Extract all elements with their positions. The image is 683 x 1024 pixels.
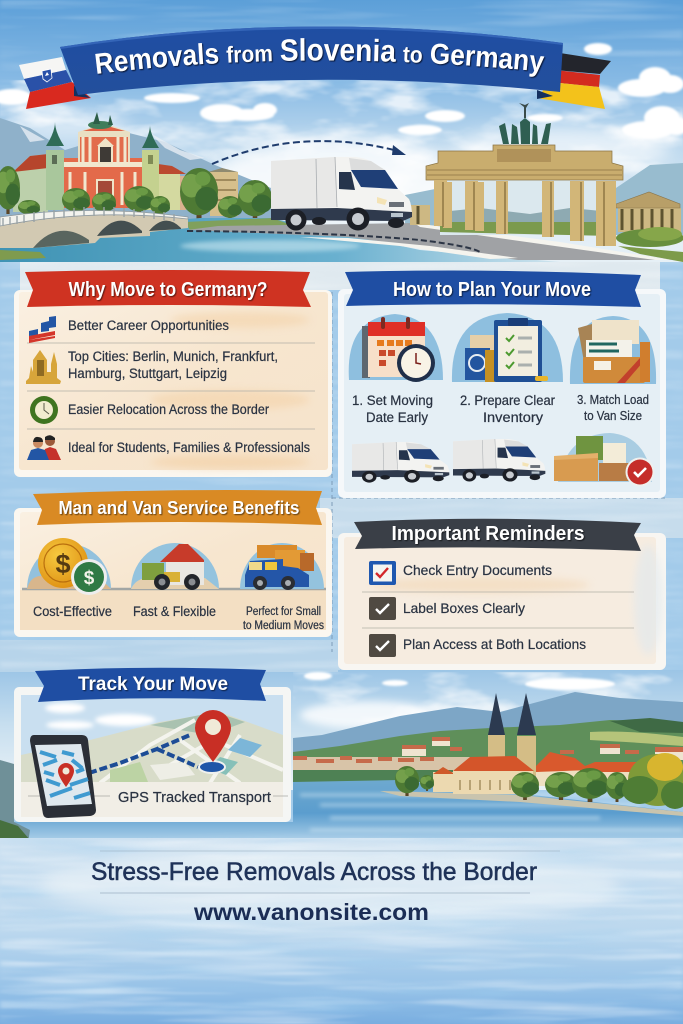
- ribbon: track: [35, 668, 266, 702]
- river: [0, 218, 560, 262]
- trees: [395, 753, 683, 809]
- caption rules: [28, 795, 288, 797]
- text: ideal for: Ideal for Students, Families & Professionals: [68, 440, 310, 455]
- step labels: to Van Size: [584, 409, 642, 423]
- reminder: entry documents: Check Entry Documents: [403, 562, 552, 578]
- reminder: plan access: [369, 634, 586, 657]
- reminder: plan access: Plan Access at Both Locations: [403, 636, 586, 652]
- Brandenburg Gate: [426, 103, 623, 246]
- icon: calendar and clock: [349, 314, 443, 382]
- text: relocation: Easier Relocation Across the Border: [68, 402, 269, 417]
- dashed dividers: [0, 0, 666, 652]
- icon: coins: $: [84, 568, 95, 589]
- phone: [30, 735, 96, 818]
- panel: how to plan: [338, 271, 666, 498]
- title text: Removals from Slovenia to Germany: [95, 38, 546, 78]
- quadriga: [499, 103, 551, 144]
- ribbon: plan: [345, 271, 641, 307]
- labels: benefits: Cost-Effective: [33, 604, 112, 619]
- step labels: 3. Match Load: [577, 393, 649, 407]
- panel: why move to Germany: [14, 270, 332, 477]
- panel: important reminders: [338, 519, 666, 670]
- row dividers: [27, 343, 315, 429]
- text: GPS: GPS Tracked Transport: [118, 790, 271, 806]
- labels: benefits: Perfect for Small: [246, 606, 321, 618]
- mountains right: [405, 163, 683, 235]
- step labels: Inventory: [483, 410, 543, 425]
- Ljubljana church and buildings: [13, 112, 238, 216]
- text: top cities: Hamburg, Stuttgart, Leipzig: [68, 366, 227, 381]
- ribbon: why move: Why Move to Germany?: [68, 279, 268, 301]
- reminder: entry documents: [369, 561, 552, 585]
- clouds: [293, 672, 683, 729]
- road: [187, 223, 672, 260]
- left shore foliage: [0, 760, 30, 846]
- hero sky: [0, 0, 683, 262]
- lake: [0, 780, 683, 840]
- icon: coins: [27, 538, 111, 595]
- right temple: [410, 192, 681, 232]
- text: top cities: Top Cities: Berlin, Munich, Frankfurt,: [68, 349, 278, 364]
- icon: document folder: [570, 316, 656, 384]
- removal van: [271, 157, 412, 230]
- panel: man and van benefits: [14, 490, 332, 637]
- ribbon: why move: [25, 270, 311, 307]
- trees by gate: [616, 227, 683, 262]
- website: www.vanonsite.com: [193, 899, 429, 925]
- reminder: label boxes: Label Boxes Clearly: [403, 600, 525, 616]
- dividers: [362, 592, 634, 628]
- icon: boxes with check: [554, 433, 654, 486]
- map pin: [195, 710, 231, 773]
- hero clouds: [0, 0, 683, 222]
- trees by the river: [0, 166, 272, 220]
- sky: [0, 670, 683, 790]
- flag: Germany: [537, 53, 611, 109]
- distant town: [293, 737, 683, 782]
- icon: loaded blue truck: [240, 543, 324, 590]
- step labels: 1. Set Moving: [352, 393, 433, 408]
- title banner: [60, 26, 563, 99]
- ribbon: reminders: [354, 519, 641, 551]
- flag: Slovenia: [19, 57, 91, 109]
- stone bridge: [0, 207, 188, 248]
- dashed route arrow: [212, 141, 406, 164]
- icon: career bars: [29, 316, 56, 343]
- icon: green clock: [30, 396, 58, 424]
- icon: city skyline: [26, 350, 61, 384]
- ribbon: track: Track Your Move: [78, 674, 228, 695]
- shoreline: [380, 791, 683, 816]
- step labels: [352, 393, 649, 425]
- reminder: label boxes: [369, 597, 525, 620]
- icon: van one: [352, 442, 449, 483]
- ribbon: reminders: Important Reminders: [392, 523, 584, 545]
- icon: clipboard inventory: [452, 313, 563, 382]
- ground line: [22, 588, 326, 590]
- labels: benefits: [33, 604, 324, 632]
- text: career: Better Career Opportunities: [68, 318, 229, 333]
- footer rule two: [100, 892, 530, 894]
- footer rule one: [100, 850, 560, 852]
- step labels: Date Early: [366, 410, 428, 425]
- panel: track your move: [14, 668, 291, 822]
- text: top cities: [68, 349, 278, 381]
- labels: benefits: to Medium Moves: [243, 620, 324, 632]
- icon: van two: [453, 439, 545, 482]
- icon: coins: $: [55, 549, 71, 579]
- icon: people: [27, 435, 61, 460]
- tagline: Stress-Free Removals Across the Border: [91, 858, 537, 886]
- ribbon: benefits: Man and Van Service Benefits: [58, 498, 300, 518]
- ribbon: benefits: [33, 490, 322, 525]
- hero scene: Slovenia to Germany: [0, 0, 683, 262]
- church towers: [488, 693, 536, 776]
- bottom water: [0, 838, 683, 1024]
- icon: van with house: [131, 543, 219, 590]
- map: [21, 695, 283, 783]
- mountains: [293, 692, 683, 780]
- step labels: 2. Prepare Clear: [460, 393, 555, 408]
- monastery: [433, 752, 640, 794]
- ribbon: plan: How to Plan Your Move: [393, 279, 591, 301]
- labels: benefits: Fast & Flexible: [133, 604, 216, 619]
- route: [89, 735, 198, 773]
- mountains left: [0, 118, 271, 232]
- caption strip: [21, 782, 283, 817]
- scene: lake town landscape: [0, 670, 683, 846]
